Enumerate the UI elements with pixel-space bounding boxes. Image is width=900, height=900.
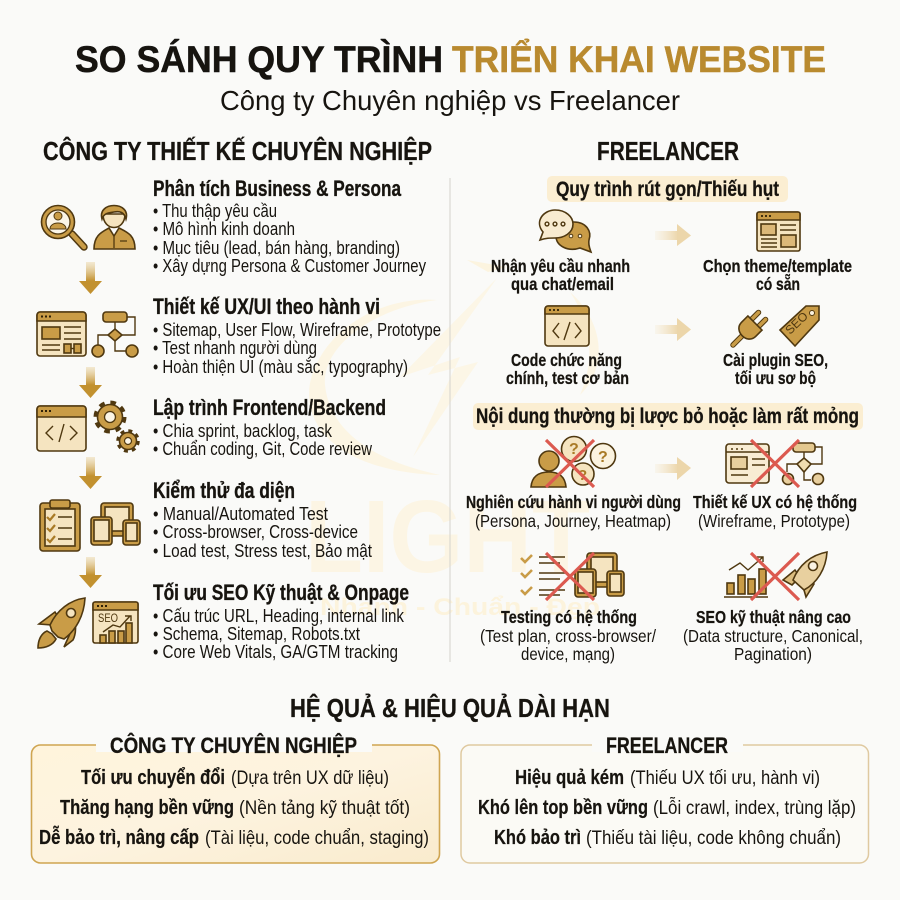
- icon: chat bubbles: [540, 210, 591, 252]
- icon: plug: [726, 309, 769, 352]
- arrow right: [655, 224, 691, 246]
- step 2 text: Thiết kế UX/UI theo hành vi: [153, 294, 380, 319]
- heading: professional company: CÔNG TY THIẾT KẾ CHUYÊN NGHIỆP: [43, 136, 432, 166]
- label: systematic testing: (Test plan, cross-browser/: [480, 626, 656, 646]
- step 4 text: • Manual/Automated Test: [153, 504, 328, 524]
- label: code features: [506, 350, 629, 388]
- divider: [449, 178, 451, 662]
- watermark logo: Nhanh - Chuẩn - Đẹp: [320, 594, 600, 621]
- icon: gears: [97, 404, 137, 450]
- step 5 text: • Core Web Vitals, GA/GTM tracking: [153, 642, 398, 662]
- panel: professional company results: Dễ bảo trì, nâng cấp: [39, 825, 199, 849]
- icon: SEO window: SEO: [98, 611, 118, 625]
- step 2 text: [153, 294, 441, 377]
- step 1 text: • Mô hình kinh doanh: [153, 219, 295, 239]
- icon: crossed SEO chart and rocket: [724, 552, 827, 600]
- arrow right: [655, 457, 691, 480]
- step 1 text: Phân tích Business & Persona: [153, 176, 402, 201]
- step 2 text: • Test nhanh người dùng: [153, 338, 317, 358]
- step 5 text: Tối ưu SEO Kỹ thuật & Onpage: [153, 580, 409, 605]
- label: SEO plugin: [723, 350, 828, 388]
- icon: clipboard checklist: [40, 500, 80, 551]
- label: code features: Code chức năng: [511, 350, 622, 370]
- step 3 text: Lập trình Frontend/Backend: [153, 395, 386, 420]
- step 1 text: • Xây dựng Persona & Customer Journey: [153, 256, 426, 276]
- label: SEO plugin: tối ưu sơ bộ: [735, 368, 816, 388]
- icon: SEO window: [93, 602, 138, 643]
- arrow down: [79, 557, 102, 588]
- panel: freelancer results: Khó bảo trì: [494, 827, 581, 849]
- label: choose theme: Chọn theme/template: [703, 256, 852, 276]
- step 2 text: • Hoàn thiện UI (màu sắc, typography): [153, 356, 408, 377]
- label: choose theme: [703, 256, 852, 294]
- label: receive request: Nhận yêu cầu nhanh: [491, 256, 630, 276]
- panel: freelancer results: Khó lên top bền vững: [478, 797, 648, 819]
- label: SEO plugin: Cài plugin SEO,: [723, 350, 828, 370]
- title: SO SÁNH QUY TRÌNH: [75, 39, 443, 80]
- icon: code window small: [545, 306, 589, 346]
- label: UX design: [693, 492, 857, 531]
- icon: magnifier with user: [42, 206, 84, 247]
- heading: freelancer: FREELANCER: [597, 138, 739, 166]
- icon: devices: [91, 503, 140, 545]
- panel: freelancer results: [461, 733, 868, 863]
- label: receive request: qua chat/email: [511, 274, 614, 294]
- step 5 text: [153, 580, 409, 662]
- icon: crossed user research: [531, 436, 616, 487]
- subtitle: Công ty Chuyên nghiệp vs Freelancer: [220, 85, 680, 116]
- watermark logo: [305, 260, 600, 621]
- arrow down: [79, 457, 102, 489]
- icon: crossed user research: ?: [598, 449, 608, 466]
- panel: freelancer results: (Thiếu tài liệu, code không chuẩn): [586, 828, 841, 849]
- icon: business person: [94, 206, 135, 249]
- label: advanced SEO: Pagination): [734, 644, 812, 664]
- panel: professional company results: [32, 733, 440, 863]
- panel: freelancer results: Hiệu quả kém: [515, 767, 624, 789]
- step 4 text: • Cross-browser, Cross-device: [153, 522, 358, 542]
- icon: SEO tag: SEO: [782, 309, 811, 337]
- panel: professional company results: (Tài liệu, code chuẩn, staging): [205, 828, 429, 849]
- panel: freelancer results: (Lỗi crawl, index, trùng lặp): [653, 797, 856, 819]
- label: behavior research: [466, 492, 681, 531]
- step 2 text: • Sitemap, User Flow, Wireframe, Prototype: [153, 320, 441, 340]
- panel: professional company results: (Nền tảng kỹ thuật tốt): [239, 798, 410, 819]
- panel: freelancer results: FREELANCER: [606, 733, 728, 758]
- icon: code window: [37, 406, 86, 451]
- label: advanced SEO: (Data structure, Canonical,: [683, 626, 863, 646]
- label: advanced SEO: SEO kỹ thuật nâng cao: [696, 607, 851, 627]
- icon: flowchart: [92, 312, 138, 357]
- icon: template window: [757, 212, 800, 251]
- step 1 text: • Mục tiêu (lead, bán hàng, branding): [153, 238, 400, 258]
- label: choose theme: có sẵn: [756, 272, 800, 294]
- label: systematic testing: device, mạng): [521, 644, 615, 664]
- step 1 text: [153, 176, 426, 276]
- arrow right: [655, 318, 691, 341]
- icon: crossed user research: ?: [569, 441, 579, 458]
- icon: SEO tag: [780, 306, 819, 346]
- step 5 text: • Schema, Sitemap, Robots.txt: [153, 624, 360, 644]
- label: systematic testing: [480, 607, 656, 664]
- label: code features: chính, test cơ bản: [506, 368, 629, 388]
- panel: freelancer results: (Thiếu UX tối ưu, hành vi): [630, 768, 820, 789]
- arrow down: [79, 262, 102, 294]
- icon: crossed user research: ?: [578, 467, 587, 484]
- heading pill: shortened process: Quy trình rút gọn/Thiếu hụt: [556, 178, 779, 201]
- step 4 text: • Load test, Stress test, Bảo mật: [153, 541, 372, 561]
- step 3 text: • Chuẩn coding, Git, Code review: [153, 439, 373, 459]
- icon: crossed UX design: [726, 440, 824, 487]
- arrow down: [79, 367, 102, 398]
- icon: wireframe browser: [37, 312, 86, 356]
- step 4 text: Kiểm thử đa diện: [153, 478, 295, 503]
- step 3 text: • Chia sprint, backlog, task: [153, 421, 333, 441]
- label: receive request: [491, 256, 630, 294]
- panel: professional company results: Tối ưu chuyển đổi: [81, 767, 225, 789]
- step 3 text: [153, 395, 386, 459]
- panel: professional company results: Thăng hạng bền vững: [60, 797, 234, 819]
- panel: professional company results: CÔNG TY CHUYÊN NGHIỆP: [110, 733, 357, 758]
- step 5 text: • Cấu trúc URL, Heading, internal link: [153, 606, 405, 626]
- icon: crossed testing: [521, 553, 624, 600]
- label: systematic testing: Testing có hệ thống: [501, 607, 637, 627]
- label: advanced SEO: [683, 607, 863, 664]
- title: [75, 38, 826, 80]
- step 4 text: [153, 478, 372, 561]
- label: behavior research: (Persona, Journey, Heatmap): [475, 511, 671, 531]
- title: TRIỂN KHAI WEBSITE: [452, 38, 826, 80]
- watermark logo: LIGHT: [305, 479, 590, 594]
- panel: professional company results: (Dựa trên UX dữ liệu): [231, 768, 389, 789]
- icon: rocket: [38, 598, 85, 648]
- label: UX design: (Wireframe, Prototype): [698, 511, 850, 531]
- label: UX design: Thiết kế UX có hệ thống: [693, 492, 857, 512]
- step 1 text: • Thu thập yêu cầu: [153, 201, 277, 221]
- heading: long-term consequences: HỆ QUẢ & HIỆU QUẢ DÀI HẠN: [290, 693, 610, 723]
- label: behavior research: Nghiên cứu hành vi người dùng: [466, 492, 681, 512]
